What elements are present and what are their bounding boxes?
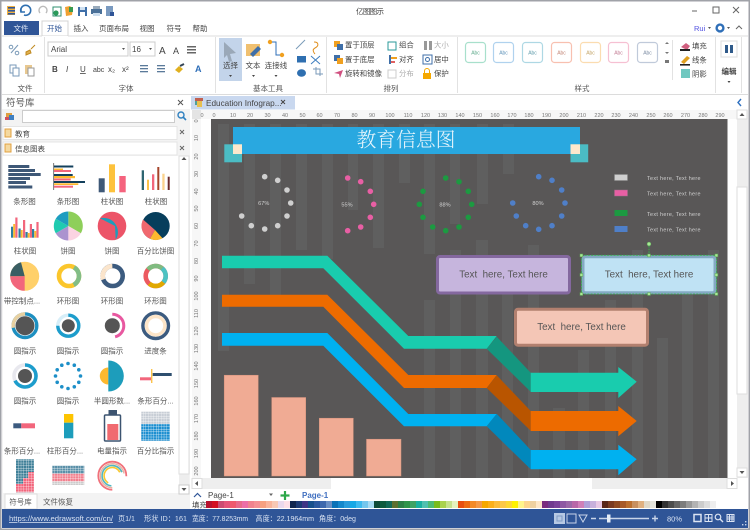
vertical scrollbar (737, 110, 748, 478)
document tab: Education Infograp... (206, 99, 282, 108)
left ruler: 160 (194, 396, 200, 406)
group: font: Arial (51, 45, 67, 54)
top ruler: 170 (507, 113, 517, 119)
dot ring: blue 80% (510, 174, 568, 232)
top ruler: 240 (629, 113, 638, 119)
app title: 亿图图示 (356, 6, 384, 16)
callout: purple (438, 256, 570, 293)
group: arrange: 对齐 (399, 55, 414, 64)
ribbon arrow: blue (222, 333, 637, 475)
active tab (42, 21, 68, 36)
shape width: 宽度：77.8253mm (192, 513, 248, 523)
icon: waffle percentage (141, 412, 170, 441)
dropdown carets (229, 75, 278, 77)
top ruler: 0 (212, 113, 216, 119)
user menu (694, 24, 742, 33)
ribbon arrow: teal (222, 256, 637, 398)
top ruler: 120 (421, 113, 430, 119)
symbol grid background (3, 156, 179, 493)
top ruler (192, 110, 737, 119)
left ruler: 200 (194, 466, 200, 476)
legend item: pink: Text here, Text here (647, 192, 701, 198)
top ruler: 270 (681, 113, 690, 119)
group: basic tools: 选择 (223, 60, 238, 70)
background stripes (218, 124, 719, 478)
group: fill, line, shadow (680, 42, 707, 78)
icon: thin column chart (142, 167, 170, 190)
group: font: B (52, 65, 58, 74)
top ruler: 0 (200, 113, 204, 119)
icon: stacked bar chart (53, 163, 85, 190)
left ruler: 10 (194, 135, 200, 141)
group: arrange: 置于底层 (345, 55, 375, 64)
icon: two-part pie (98, 212, 126, 240)
group: font: 字体 (118, 83, 134, 93)
left ruler: 0 (194, 119, 200, 123)
top ruler: 190 (542, 113, 551, 119)
file tab (4, 21, 39, 35)
symbol labels: 条形图 (57, 196, 79, 206)
icon: circle indicator blue (58, 315, 79, 336)
group: arrange (334, 40, 449, 93)
icon: circle indicator dashed (11, 312, 39, 339)
top ruler: 100 (385, 113, 395, 119)
top ruler: 230 (611, 113, 621, 119)
left ruler: 180 (194, 431, 200, 441)
zoom slider (591, 514, 682, 524)
group: fill, line, shadow: 线条 (692, 56, 707, 64)
callout: salmon (516, 309, 648, 345)
close button (178, 100, 183, 105)
group: font: x₂ (108, 65, 115, 74)
dot ring: blue 80%: 80% (532, 201, 544, 207)
tab labels: 视图 (140, 23, 154, 33)
ribbon tabs (4, 21, 208, 36)
group: styles: Abc (557, 50, 566, 56)
left ruler: 90 (194, 275, 200, 282)
group: arrange: 居中 (434, 55, 449, 64)
top ruler: 150 (473, 113, 482, 119)
select button (219, 38, 242, 81)
left ruler: 70 (194, 240, 200, 247)
group: arrange: 组合 (399, 40, 414, 50)
group: basic tools: 文本 (246, 60, 261, 70)
symbol labels: 电量指示 (97, 446, 127, 456)
icon: bar percentage (13, 423, 35, 428)
ribbon arrow: orange (222, 295, 637, 436)
symbol labels: 圆指示 (57, 396, 80, 406)
top ruler: 250 (646, 113, 656, 119)
icon: percentage pie (141, 212, 170, 240)
icon: five-part pie (54, 212, 83, 240)
top ruler: 200 (559, 113, 569, 119)
group: styles: Abc (614, 50, 623, 56)
tab labels: 帮助 (192, 23, 208, 33)
icon: semicircle indicator (100, 360, 124, 392)
top ruler: 280 (698, 113, 708, 119)
group: styles: Abc (499, 50, 508, 56)
window controls (692, 7, 739, 13)
group: basic tools: 基本工具 (253, 83, 283, 93)
symbol labels: 条形百分... (4, 446, 40, 456)
tab labels: 页面布局 (99, 23, 129, 33)
symbol labels: 圆指示 (14, 396, 37, 406)
top ruler: 290 (715, 113, 725, 119)
page count: 页1/1 (118, 514, 135, 523)
panel bottom tabs (5, 494, 73, 509)
group: arrange: 置于顶层 (345, 40, 375, 50)
top ruler: 220 (594, 113, 604, 119)
symbol labels: 条形百分... (137, 396, 174, 406)
left ruler: 140 (194, 361, 200, 371)
selection frame and handles (580, 242, 718, 295)
symbol labels: 柱状图 (101, 196, 123, 206)
group: font: x² (122, 65, 129, 74)
page tabs: Page-1 (302, 491, 329, 500)
symbol labels: 饼图 (104, 246, 120, 256)
title: 教育信息图 (357, 124, 455, 152)
symbol labels: 柱状图 (145, 196, 167, 206)
symbol labels: 饼图 (60, 246, 76, 256)
top ruler: 30 (264, 113, 271, 119)
icon: progress ring (143, 313, 168, 339)
title bar (7, 5, 742, 33)
top ruler: 60 (316, 113, 323, 119)
icon: bar percentage T (140, 369, 172, 383)
ribbon (2, 36, 748, 94)
category: education (3, 126, 184, 140)
url: https://www.edrawsoft.com/cn/ (9, 514, 114, 523)
shape angle: 角度：0deg (319, 513, 356, 523)
symbol labels: 带控制点... (4, 296, 40, 306)
group: styles: Abc (471, 50, 480, 56)
group: font: U (80, 65, 86, 74)
left ruler: 80 (194, 258, 200, 264)
top ruler: 130 (438, 113, 447, 119)
panel scrollbar (179, 156, 189, 494)
symbol labels: 圆指示 (14, 346, 37, 356)
dot ring: grey 67% (239, 174, 294, 232)
icon: circle indicator pink (101, 314, 124, 337)
shape tools (296, 40, 305, 49)
top ruler: 90 (369, 113, 375, 119)
dot ring: pink 55% (341, 175, 377, 234)
top ruler: 80 (351, 113, 358, 119)
top ruler: 140 (455, 113, 465, 119)
tab labels (14, 23, 208, 33)
shape height: 高度：22.1964mm (256, 513, 314, 523)
symbol labels: 百分比饼图 (137, 246, 174, 256)
white page margins (728, 119, 737, 478)
symbol labels: 柱形百分... (47, 446, 83, 456)
icon: dotted circle (54, 362, 82, 390)
panel bottom tabs: 文件恢复 (43, 496, 73, 506)
text button (246, 44, 260, 56)
top ruler: 180 (524, 113, 534, 119)
symbol labels: 环形图 (144, 296, 167, 306)
horizontal scrollbar (192, 478, 737, 489)
callout: light blue (selected): Text here, Text here (605, 270, 694, 280)
group: font: A (173, 46, 179, 56)
left ruler: 190 (194, 449, 200, 458)
dot ring: green 88% (416, 175, 475, 234)
icon: column chart (99, 164, 126, 192)
group: font: A (159, 46, 166, 57)
left corner square (224, 144, 242, 162)
group: arrange: 保护 (434, 69, 449, 78)
symbol labels: 半圆形数... (94, 396, 130, 406)
group: styles: Abc (528, 50, 537, 56)
category: education: 教育 (15, 128, 30, 138)
group: arrange: 分布 (399, 69, 414, 78)
tab labels: 插入 (74, 23, 89, 33)
group: styles: 样式 (574, 83, 590, 93)
icon: ring four colours (142, 262, 170, 290)
top ruler: 210 (577, 113, 586, 119)
title banner (224, 124, 588, 162)
group: font: abc (93, 67, 105, 74)
left ruler: 120 (194, 326, 200, 336)
group: edit: 编辑 (722, 66, 737, 76)
left ruler: 50 (194, 205, 200, 212)
resize grip (742, 521, 746, 525)
legend (614, 174, 701, 234)
group: basic tools: 连接线 (265, 60, 288, 70)
icon: grouped column chart (11, 218, 39, 238)
top ruler: 110 (404, 113, 412, 119)
group: basic tools (219, 38, 323, 93)
connector button (268, 40, 272, 44)
dot ring: pink 55%: 55% (341, 202, 353, 208)
left ruler: 130 (194, 344, 200, 353)
group: fill, line, shadow: 阴影 (692, 70, 707, 78)
tab labels: 符号 (166, 23, 182, 33)
left ruler (192, 119, 201, 478)
icon: battery indicator (104, 410, 120, 441)
document tab (191, 96, 295, 110)
top ruler: 70 (334, 113, 340, 119)
zoom slider: 80% (667, 514, 682, 524)
top ruler: 260 (663, 113, 673, 119)
symbol labels: 柱状图 (14, 246, 36, 256)
top ruler: 10 (230, 113, 236, 119)
page tabs (194, 491, 329, 500)
legend item: grey: Text here, Text here (647, 176, 701, 182)
dot ring: green 88%: 88% (439, 202, 451, 208)
group: fill, line, shadow: 填充 (692, 42, 707, 50)
view buttons (554, 513, 587, 524)
symbol labels: 圆指示 (57, 346, 80, 356)
group: font: 16 (132, 45, 141, 54)
quick access toolbar icons (7, 5, 114, 16)
group: arrange: 旋转和镜像 (345, 69, 383, 78)
symbol labels (4, 196, 175, 456)
group: styles (466, 42, 669, 93)
symbol library panel (2, 95, 190, 509)
group: styles: Abc (643, 50, 652, 56)
left ruler: 170 (194, 414, 200, 423)
icon: ring yellow green (55, 262, 83, 290)
left ruler: 110 (194, 309, 200, 318)
left ruler: 30 (194, 171, 200, 177)
symbol labels: 进度条 (144, 346, 167, 356)
shape id: 形状 ID：161 (144, 513, 187, 523)
status bar (2, 509, 748, 528)
group: arrange: 大小 (434, 40, 449, 50)
callout: light blue (selected) (580, 242, 718, 295)
legend item: blue: Text here, Text here (647, 228, 701, 234)
icon: column percentage (64, 414, 73, 438)
top ruler: 160 (490, 113, 500, 119)
icon: waffle chart tall (16, 459, 34, 492)
search row (5, 110, 186, 122)
group: font: I (66, 65, 69, 74)
legend item: green: Text here, Text here (647, 212, 701, 218)
top ruler: 20 (247, 113, 253, 119)
group: file: 文件 (18, 83, 33, 93)
panel collapse arrow (738, 99, 741, 106)
bar chart (224, 375, 401, 476)
group: styles: Abc (586, 50, 595, 56)
page tabs: Page-1 (208, 491, 234, 500)
top ruler: 40 (282, 113, 288, 119)
group: file (9, 45, 35, 93)
top ruler: 50 (299, 113, 306, 119)
callout: purple: Text here, Text here (459, 270, 548, 280)
panel heading: 符号库 (6, 97, 35, 109)
tab labels: 文件 (14, 23, 29, 33)
icon: waffle chart wide (52, 466, 84, 485)
icon: ring navy peach (100, 263, 126, 289)
zoom tool icons (694, 514, 734, 522)
user menu: Rui (694, 24, 706, 33)
left ruler: 20 (194, 153, 200, 160)
tab labels: 开始 (47, 23, 62, 33)
left ruler: 100 (194, 291, 200, 301)
fill palette label: 填充 (192, 500, 207, 510)
icon: circle indicator grey ring (14, 365, 36, 387)
panel bottom tabs: 符号库 (9, 496, 32, 506)
category: infographics: 信息图表 (15, 144, 45, 154)
left ruler: 60 (194, 223, 200, 229)
left ruler: 150 (194, 379, 200, 388)
right corner square (570, 144, 588, 162)
left ruler: 40 (194, 188, 200, 195)
group: edit (721, 41, 737, 83)
icon: horizontal bar chart (8, 165, 41, 188)
dot ring: grey 67%: 67% (258, 201, 269, 207)
colour palette (206, 501, 716, 508)
group: font (48, 42, 202, 93)
group: arrange: 排列 (384, 83, 398, 93)
symbol labels: 环形图 (57, 296, 79, 306)
banner bar (233, 127, 580, 154)
infographic canvas (211, 119, 728, 478)
icon: rainbow arcs (98, 462, 126, 490)
symbol labels: 百分比指示 (137, 446, 175, 456)
category: infographics (3, 142, 184, 155)
symbol labels: 环形图 (101, 296, 123, 306)
callout: salmon: Text here, Text here (537, 322, 626, 333)
symbol labels: 圆指示 (101, 346, 124, 356)
icon: pie with control points (10, 262, 39, 291)
symbol labels: 条形图 (13, 196, 36, 206)
group: font: A (195, 64, 202, 74)
